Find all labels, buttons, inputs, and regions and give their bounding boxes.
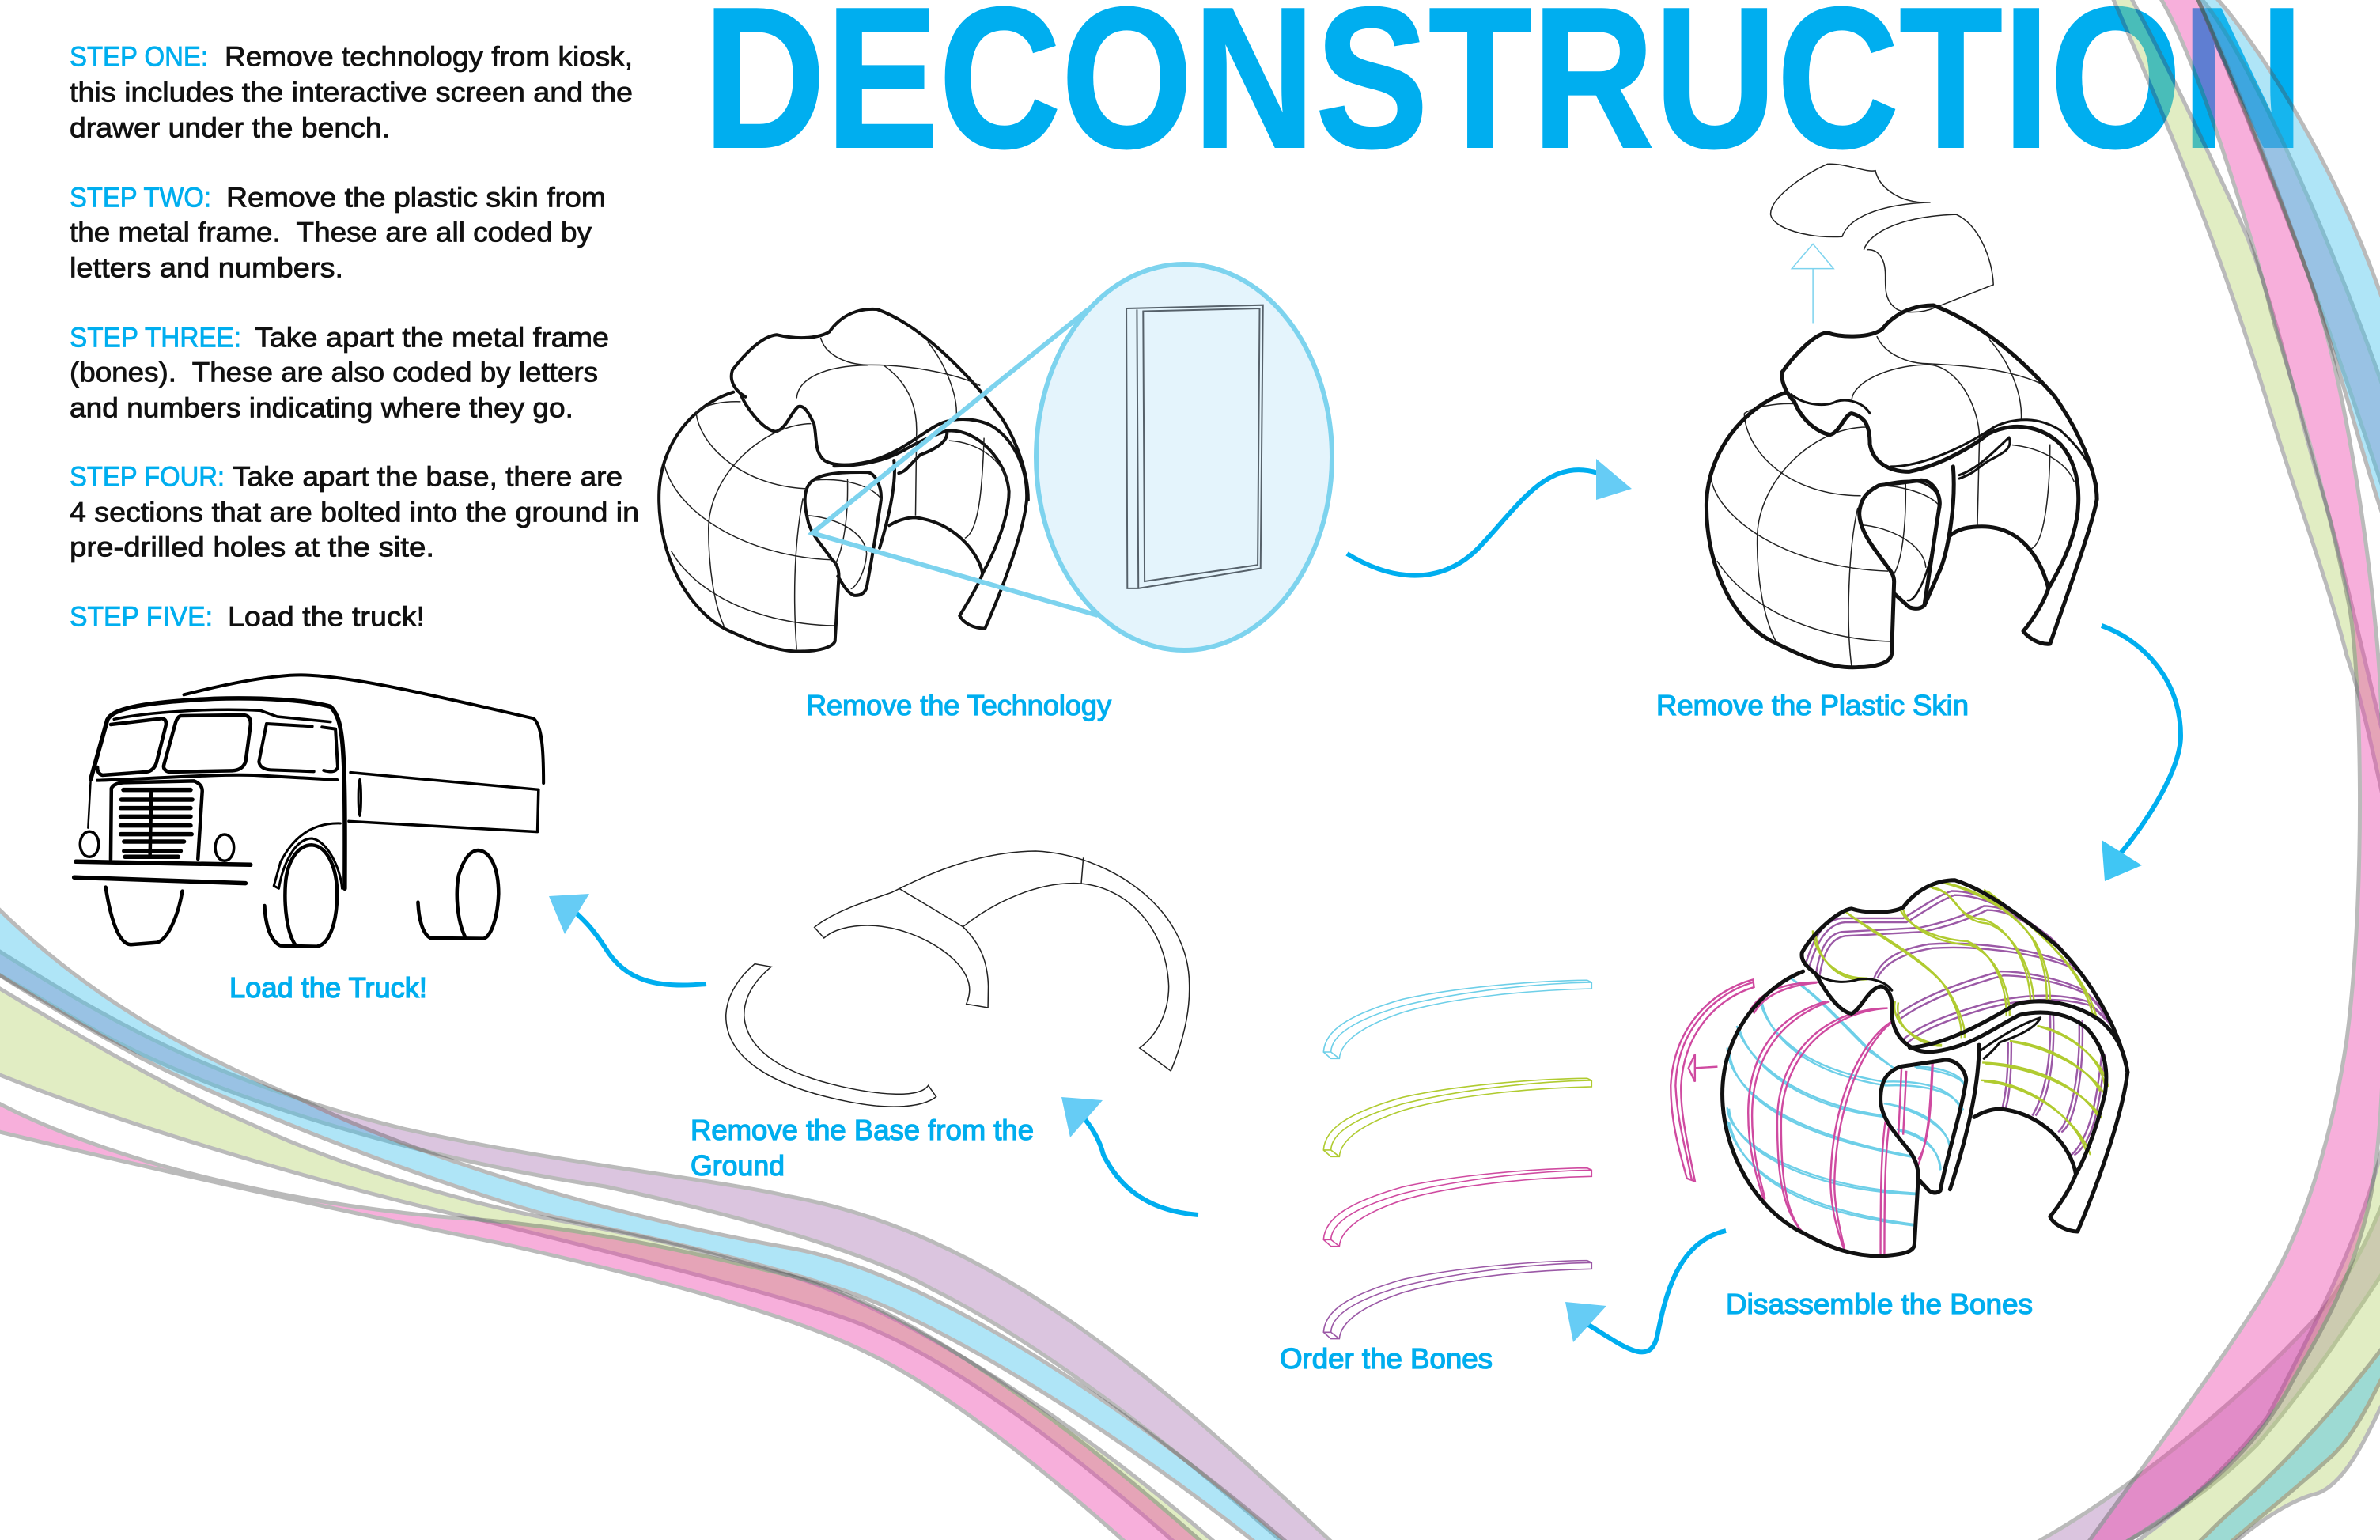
bones: purple: [1807, 891, 2113, 1156]
bone: purple: [1323, 1261, 1591, 1339]
label: load the truck: Load the Truck!: [229, 971, 427, 1004]
ribbons: top right: [2088, 0, 2380, 1540]
bones: cyan: [1727, 978, 1965, 1226]
diagram: ordered bones: [1323, 980, 1591, 1339]
bone: pink: [1323, 1168, 1591, 1247]
text block: steps: this includes the interactive screen and the: [70, 78, 633, 108]
icon: truck: [74, 675, 543, 947]
text block: steps: Remove the plastic skin from: [226, 182, 606, 214]
ribbons: bottom left: [0, 906, 1332, 1540]
arrow: order to base: [1061, 1097, 1198, 1215]
arrow: bones to order: [1565, 1231, 1726, 1352]
text block: steps: STEP THREE:: [70, 323, 241, 353]
outline: kiosk: [1723, 880, 2128, 1256]
label: remove the base: Remove the Base from the: [691, 1114, 1034, 1146]
text block: steps: STEP ONE:: [70, 41, 208, 73]
text block: steps: drawer under the bench.: [70, 112, 390, 144]
label: remove the technology: Remove the Technology: [806, 689, 1111, 721]
callout: magnified screen: [812, 264, 1332, 650]
label: disassemble the bones: Disassemble the Bones: [1726, 1288, 2033, 1320]
text block: steps: Remove technology from kiosk,: [225, 41, 633, 73]
arrow: technology to skin: [1347, 459, 1632, 576]
text block: steps: [70, 41, 639, 633]
diagram: kiosk with technology: [659, 309, 1028, 652]
text block: steps: (bones). These are also coded by letters: [70, 358, 598, 388]
bone being removed: [1671, 979, 1754, 1181]
text block: steps: Load the truck!: [228, 601, 425, 633]
text block: steps: Take apart the metal frame: [255, 323, 609, 353]
bone: cyan: [1323, 980, 1591, 1058]
text block: steps: STEP TWO:: [70, 182, 211, 214]
text block: steps: pre-drilled holes at the site.: [70, 532, 434, 563]
label: remove the base: [691, 1114, 1034, 1182]
text block: steps: STEP FIVE:: [70, 601, 213, 633]
diagram: kiosk with coloured bones: [1671, 880, 2128, 1256]
diagram: kiosk with plastic skin removed: [1706, 164, 2097, 668]
text block: steps: and numbers indicating where they go.: [70, 392, 573, 424]
ribbons: bottom right: [2037, 1147, 2380, 1540]
diagram: base pieces: [726, 851, 1190, 1107]
text block: steps: the metal frame. These are all coded by: [70, 217, 592, 248]
label: remove the plastic skin: Remove the Plastic Skin: [1656, 689, 1969, 721]
bones: pink: [1748, 982, 1933, 1255]
bone: green: [1323, 1078, 1591, 1156]
label: remove the base: Ground: [691, 1149, 785, 1182]
bones: green: [1813, 881, 2108, 1155]
label: order the bones: Order the Bones: [1280, 1342, 1493, 1375]
arrow: base to truck: [549, 894, 706, 986]
text block: steps: STEP FOUR:: [70, 462, 225, 492]
arrow: skin to bones: [2102, 626, 2181, 881]
text block: steps: Take apart the base, there are: [233, 462, 622, 492]
text block: steps: letters and numbers.: [70, 253, 343, 283]
text block: steps: 4 sections that are bolted into the ground in: [70, 497, 639, 528]
